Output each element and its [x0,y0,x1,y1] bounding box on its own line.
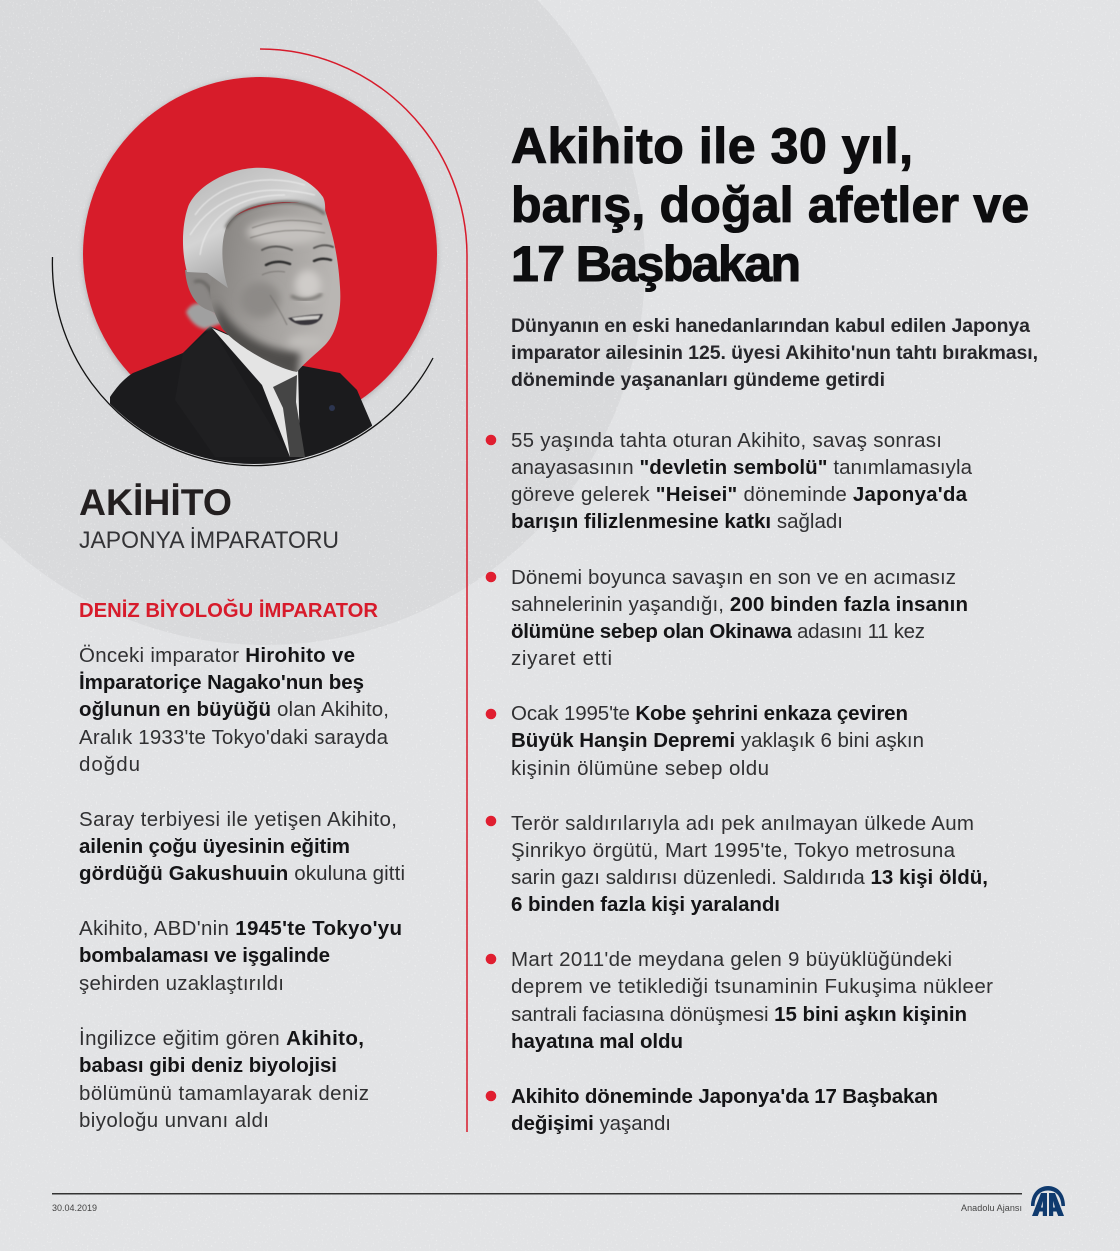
mouth [288,314,323,325]
icon: AA logo [1031,1186,1065,1216]
portrait of Akihito [110,168,372,470]
bullet 6 [486,1085,938,1135]
intro text: döneminde yaşananları gündeme getirdi [511,369,885,391]
main title [511,118,1029,292]
bullet 3: kişinin ölümüne sebep oldu [511,757,769,780]
main title: 17 Başbakan [511,236,801,292]
hairline shadow [226,202,325,228]
bullet 1: göreve gelerek "Heisei" döneminde Japonya'da [511,483,968,506]
intro text: Dünyanın en eski hanedanlarından kabul edilen Japonya [511,315,1030,337]
shirt [212,328,300,457]
paragraph: war [79,917,402,995]
paragraph: war: bombalaması ve işgalinde [79,944,330,967]
bullet 3: Büyük Hanşin Depremi yaklaşık 6 bini aşkın [511,729,924,752]
neck hair [186,303,226,329]
paragraph: education: gördüğü Gakushuuin okuluna gitti [79,862,405,885]
bullet 2: Dönemi boyunca savaşın en son ve en acımasız [511,566,956,589]
face wrinkles [250,220,325,325]
paragraph: education: ailenin çoğu üyesinin eğitim [79,835,350,858]
bullet 3: Ocak 1995'te Kobe şehrini enkaza çeviren [511,702,908,725]
paragraph: birth: İmparatoriçe Nagako'nun beş [79,671,364,694]
bullet 3 [486,702,924,780]
face shading [215,219,325,380]
paragraph: marine biology: babası gibi deniz biyolojisi [79,1054,337,1077]
paragraph: war: Akihito, ABD'nin 1945'te Tokyo'yu [79,917,402,940]
paragraph: marine biology [79,1027,369,1132]
bullet 2: ziyaret etti [511,647,612,670]
intro text: imparator ailesinin 125. üyesi Akihito'nun tahtı bırakması, [511,342,1038,364]
bullet 2: ölümüne sebep olan Okinawa adasını 11 kez [511,620,925,643]
hair [183,168,325,288]
bullet 1 [486,429,973,533]
paragraph: war: şehirden uzaklaştırıldı [79,972,284,995]
bullet 5: Mart 2011'de meydana gelen 9 büyüklüğündeki [511,948,952,971]
paragraph: marine biology: İngilizce eğitim gören Akihito, [79,1027,364,1050]
paragraph: marine biology: biyoloğu unvanı aldı [79,1109,269,1132]
bullet 1: 55 yaşında tahta oturan Akihito, savaş sonrası [511,429,942,452]
paragraph: birth: Önceki imparator Hirohito ve [79,644,355,667]
bullet 4: 6 binden fazla kişi yaralandı [511,893,780,916]
tie [273,375,305,457]
lapel pin [329,405,335,411]
paragraph: education: Saray terbiyesi ile yetişen Akihito, [79,808,397,831]
footer rule [52,1193,1022,1194]
red sun circle [83,77,437,431]
bullet 4: sarin gazı saldırısı düzenledi. Saldırıda 13 kişi öldü, [511,866,988,889]
bullet 4: Terör saldırılarıyla adı pek anılmayan ülkede Aum [511,812,974,835]
bullet 5: santrali faciasına dönüşmesi 15 bini aşkın kişinin [511,1003,967,1026]
paragraph: birth: doğdu [79,753,140,776]
bullet 5: deprem ve tetiklediği tsunaminin Fukuşima nükleer [511,975,993,998]
bullet 5: hayatına mal oldu [511,1030,683,1053]
face [210,203,340,372]
bullet 1: anayasasının "devletin sembolü" tanımlamasıyla [511,456,973,479]
paragraph: birth: oğlunun en büyüğü olan Akihito, [79,698,389,721]
ear [185,270,214,312]
bullet 1: barışın filizlenmesine katkı sağladı [511,510,843,533]
date: 30.04.2019 [52,1203,97,1213]
suit shading [183,351,185,353]
bullet 5 [486,948,993,1053]
paragraph: birth [79,644,389,776]
bullet 4 [486,812,988,916]
subtitle: JAPONYA İMPARATORU [79,527,339,554]
eyes and brows [262,245,333,265]
main title: barış, doğal afetler ve [511,177,1029,233]
bullet 2 [486,566,968,670]
intro text [511,315,1038,391]
paragraph: education [79,808,405,885]
black arc [52,257,433,466]
section heading: DENİZ BİYOLOĞU İMPARATOR [79,598,378,622]
bullet 6: Akihito döneminde Japonya'da 17 Başbakan [511,1085,938,1108]
hair strands [190,180,315,255]
name heading: AKİHİTO [79,482,232,523]
paragraph: birth: Aralık 1933'te Tokyo'daki sarayda [79,726,389,749]
bullet 6: değişimi yaşandı [511,1112,671,1135]
bullet 4: Şinrikyo örgütü, Mart 1995'te, Tokyo metrosuna [511,839,956,862]
bullet 2: sahnelerinin yaşandığı, 200 binden fazla insanın [511,593,968,616]
nose shadow [291,294,322,300]
background circle [0,0,645,645]
paragraph: marine biology: bölümünü tamamlayarak deniz [79,1082,369,1105]
suit [110,326,372,470]
main title: Akihito ile 30 yıl, [511,118,913,174]
source: Anadolu Ajansı [961,1203,1022,1213]
left column text [79,644,405,1132]
red arc and vertical divider [260,49,467,1132]
